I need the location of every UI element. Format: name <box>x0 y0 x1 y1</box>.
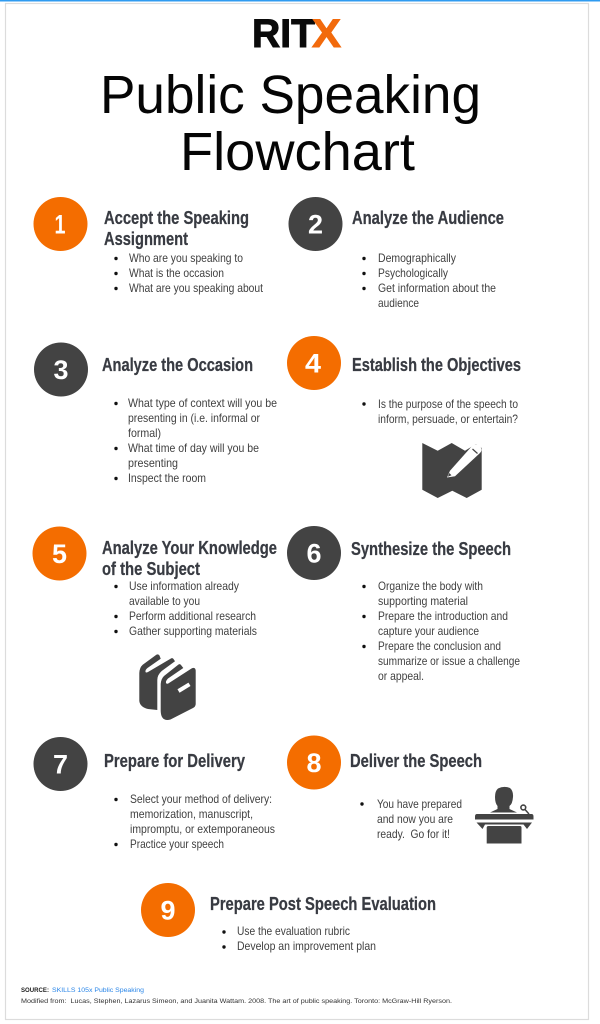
footer: source <box>21 987 452 1005</box>
bullets 6: supporting material <box>378 594 468 608</box>
icon: map with pencil <box>422 443 482 498</box>
bullets 3 <box>114 396 277 485</box>
bullets 6: Organize the body with <box>378 579 483 593</box>
bullets 3: Inspect the room <box>128 471 206 485</box>
logo: RITX: RIT <box>252 12 315 56</box>
number badge 2: 2 <box>308 210 323 240</box>
number badge 5 <box>32 526 86 580</box>
bullets 4: inform, persuade, or entertain? <box>378 412 518 426</box>
footer: source: SKILLS 105x Public Speaking <box>52 987 144 994</box>
bullets 1: What are you speaking about <box>129 281 264 295</box>
bullets 5: Use information already <box>129 579 239 593</box>
bullets 7 <box>114 792 275 851</box>
footer: source: SOURCE: <box>21 987 49 994</box>
number badge 3 <box>34 342 88 396</box>
step 6: Synthesize the Speech <box>287 526 520 683</box>
heading 3: Analyze the Occasion <box>102 355 253 375</box>
bullets 3: formal) <box>128 426 161 440</box>
footer: source: Modified from: Lucas, Stephen, Lazarus Simeon, and Juanita Wattam. 2008. The art of public speaking. Toronto: McGraw-Hill Ryerson. <box>21 998 452 1005</box>
step 5: Analyze Your Knowledge of the Subject <box>32 526 277 720</box>
heading 7: Prepare for Delivery <box>104 751 245 771</box>
heading 8: Deliver the Speech <box>350 751 482 771</box>
step 2: Analyze the Audience <box>288 197 504 310</box>
bullets 6: or appeal. <box>378 669 424 683</box>
title: Public Speaking <box>100 65 481 125</box>
bullets 2: Psychologically <box>378 266 448 280</box>
number badge 4: 4 <box>305 348 321 378</box>
heading 2: Analyze the Audience <box>352 208 504 228</box>
icon: books <box>139 654 196 720</box>
number badge 7 <box>34 737 88 791</box>
heading 4: Establish the Objectives <box>352 355 521 375</box>
number badge 8: 8 <box>306 748 322 778</box>
number badge 6: 6 <box>306 538 322 568</box>
heading 1 <box>104 208 249 249</box>
bullets 7: Select your method of delivery: <box>130 792 272 806</box>
bullets 3: What time of day will you be <box>128 441 259 455</box>
heading 5: Analyze Your Knowledge <box>102 538 277 558</box>
bullets 7: Practice your speech <box>130 837 224 851</box>
heading 9: Prepare Post Speech Evaluation <box>210 894 436 914</box>
bullets 9 <box>222 924 376 953</box>
bullets 6: capture your audience <box>378 624 479 638</box>
number badge 7: 7 <box>53 750 68 780</box>
bullets 5: Perform additional research <box>129 609 256 623</box>
number badge 8 <box>287 736 341 790</box>
bullets 7: memorization, manuscript, <box>130 807 253 821</box>
step 7: Prepare for Delivery <box>34 737 275 851</box>
bullets 4: Is the purpose of the speech to <box>378 397 518 411</box>
step 8: Deliver the Speech <box>287 736 534 844</box>
bullets 3: presenting <box>128 456 178 470</box>
heading 6: Synthesize the Speech <box>351 539 511 559</box>
number badge 1: 1 <box>54 210 66 240</box>
bullets 2: Get information about the <box>378 281 496 295</box>
number badge 5: 5 <box>52 539 67 569</box>
bullets 2: audience <box>378 296 419 310</box>
heading 1: Assignment <box>104 229 188 249</box>
number badge 9: 9 <box>160 896 176 926</box>
bullets 5: Gather supporting materials <box>129 624 257 638</box>
bullets 6: Prepare the conclusion and <box>378 639 501 653</box>
bullets 1: What is the occasion <box>129 266 224 280</box>
bullets 8 <box>360 797 462 841</box>
heading 1: Accept the Speaking <box>104 208 249 228</box>
bullets 5 <box>114 579 257 638</box>
step 1: Accept the Speaking Assignment <box>34 197 264 295</box>
step 4: Establish the Objectives <box>287 336 521 498</box>
step 9: Prepare Post Speech Evaluation <box>141 883 436 953</box>
bullets 8: and now you are <box>377 812 453 826</box>
bullets 1 <box>114 251 264 295</box>
bullets 3: presenting in (i.e. informal or <box>128 411 260 425</box>
number badge 1 <box>34 197 88 251</box>
bullets 2: Demographically <box>378 251 456 265</box>
bullets 6: Prepare the introduction and <box>378 609 508 623</box>
logo: RITX: X <box>312 12 341 56</box>
bullets 1: Who are you speaking to <box>129 251 243 265</box>
number badge 3: 3 <box>54 355 68 385</box>
title <box>100 65 481 182</box>
bullets 7: impromptu, or extemporaneous <box>130 822 275 836</box>
heading 5: of the Subject <box>102 559 200 579</box>
number badge 4 <box>287 336 341 390</box>
icon: speaker at podium <box>475 787 534 844</box>
bullets 8: You have prepared <box>377 797 462 811</box>
heading 5 <box>102 538 277 579</box>
bullets 3: What type of context will you be <box>128 396 277 410</box>
bullets 9: Use the evaluation rubric <box>237 924 350 938</box>
number badge 9 <box>141 883 195 937</box>
title: Flowchart <box>180 122 415 182</box>
number badge 2 <box>288 197 342 251</box>
number badge 6 <box>287 526 341 580</box>
bullets 2 <box>362 251 496 310</box>
bullets 4 <box>362 397 518 426</box>
bullets 5: available to you <box>129 594 200 608</box>
step 3: Analyze the Occasion <box>34 342 277 485</box>
bullets 9: Develop an improvement plan <box>237 939 376 953</box>
bullets 6: summarize or issue a challenge <box>378 654 520 668</box>
bullets 6 <box>362 579 520 683</box>
bullets 8: ready. Go for it! <box>377 827 450 841</box>
